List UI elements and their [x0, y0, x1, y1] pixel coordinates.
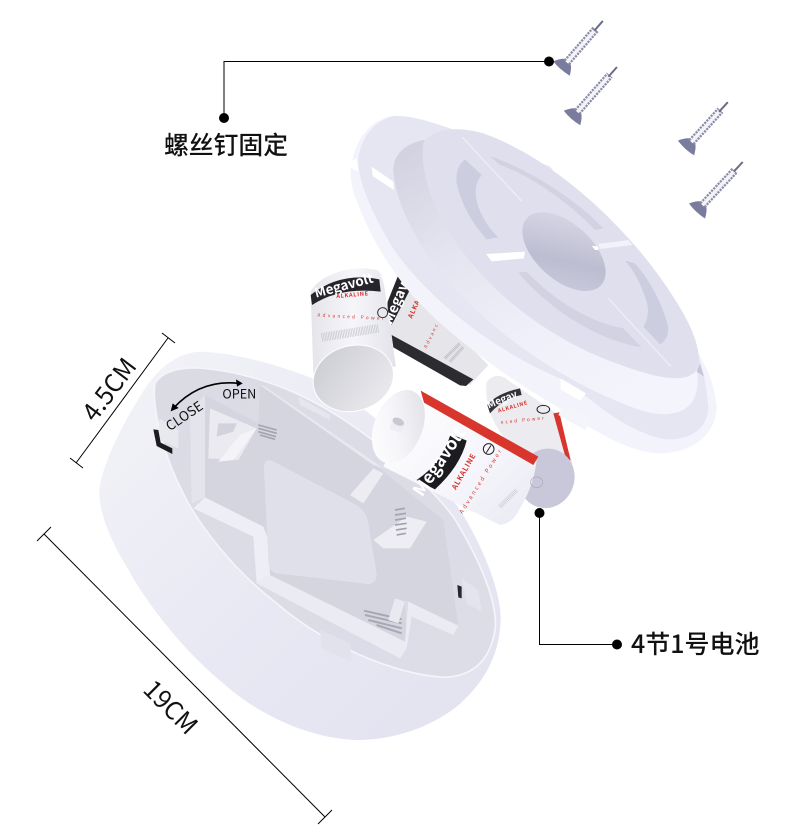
- compartment left wall: [190, 395, 205, 503]
- fine print: [445, 343, 463, 362]
- battery D terminal: [389, 416, 405, 433]
- spring lower: [364, 611, 402, 633]
- brand text: Megav: [378, 279, 413, 327]
- black band top: [387, 275, 411, 325]
- battery A power: Advanced Power: [317, 312, 386, 322]
- dimension line: diameter: [37, 527, 332, 824]
- compartment wall band bottom: [257, 575, 458, 658]
- battery A body: [311, 268, 396, 373]
- screw 3: [677, 95, 736, 156]
- spring right: [395, 508, 407, 535]
- bottom clip: [320, 630, 352, 662]
- side switch: [457, 578, 482, 612]
- battery D red strip: [421, 391, 538, 465]
- battery D top end: [362, 382, 435, 471]
- battery body: [486, 376, 573, 483]
- battery A label: [311, 277, 381, 305]
- housing cavity: [154, 368, 495, 677]
- dimension line: height: [70, 333, 175, 468]
- screw 2: [563, 60, 625, 126]
- flange silhouette: [351, 116, 717, 453]
- alkaline text: ALKA: [404, 298, 422, 321]
- black band bottom: [392, 335, 473, 386]
- metal contact right: [350, 468, 427, 548]
- battery body: [389, 275, 488, 385]
- battery D alkaline: ALKALINE: [448, 451, 479, 493]
- battery D mark: [483, 444, 494, 454]
- label: four D batteries: 4节1号电池: [631, 625, 760, 661]
- battery A fine print: [322, 328, 378, 337]
- spring contact tab: [388, 598, 405, 623]
- cutout lower: [561, 378, 586, 401]
- brand text: Megav: [484, 386, 519, 411]
- battery A: [306, 268, 401, 420]
- battery D power: Advanced Power: [456, 446, 505, 515]
- small slot: [592, 246, 598, 250]
- dimension label: 4.5CM: 4.5CM: [73, 350, 144, 428]
- crescent groove right: [625, 261, 668, 344]
- arc groove bottom: [518, 272, 642, 347]
- crescent groove left: [456, 159, 498, 239]
- battery A mark: [378, 308, 388, 318]
- dimension label: 19CM: 19CM: [136, 671, 207, 742]
- screw 1: [553, 14, 611, 76]
- arc groove top: [490, 156, 603, 230]
- slot right: [598, 240, 633, 249]
- latch: [153, 418, 178, 454]
- center recess: [508, 197, 620, 306]
- center panel: [264, 460, 377, 584]
- compartment wall band left: [193, 497, 270, 583]
- battery D: [362, 382, 543, 525]
- battery D label: [417, 434, 467, 489]
- rotation arrow: [171, 379, 243, 411]
- alkaline text: ALKALINE: [496, 398, 529, 415]
- advanced text: Advanc: [422, 321, 441, 349]
- battery compartment floor: [205, 385, 458, 645]
- black band: [487, 388, 522, 413]
- top mounting plate: [350, 116, 717, 453]
- flange tab: [558, 405, 592, 430]
- housing outer wall: [99, 352, 501, 740]
- battery back black band: [378, 275, 488, 386]
- upper clip: [298, 397, 330, 420]
- slot left: [486, 252, 525, 261]
- power text: nced Power: [500, 414, 546, 426]
- edge notch: [350, 158, 358, 172]
- cutout left: [372, 167, 394, 190]
- flange top surface: [358, 116, 708, 439]
- disc side wall: [393, 140, 698, 414]
- battery A brand: Megavolt: [312, 268, 375, 302]
- battery D brand: Megavolt: [406, 421, 470, 500]
- battery A end: [306, 336, 401, 420]
- spring upper: [258, 425, 277, 439]
- metal contact upper: [208, 408, 257, 462]
- label: screw fixing: 螺丝钉固定: [164, 126, 288, 162]
- leader line: screws: [219, 56, 554, 123]
- disc face: [423, 129, 699, 378]
- leader line: batteries: [534, 508, 622, 650]
- battery D body: [383, 390, 537, 525]
- polarity mark: [537, 405, 550, 413]
- red strip: [553, 412, 571, 461]
- rib lower: [608, 298, 671, 367]
- rib upper: [462, 137, 522, 201]
- screw 4: [688, 154, 751, 219]
- batteries front: [306, 268, 543, 525]
- label open: OPEN: [222, 384, 256, 403]
- battery D inner end: [531, 477, 543, 488]
- bottom housing: [99, 352, 501, 740]
- label close: CLOSE: [162, 396, 206, 435]
- battery D fine print: [500, 490, 517, 507]
- compartment upper wall: [260, 385, 383, 468]
- flange shade: [697, 363, 704, 377]
- battery A alkaline: ALKALINE: [335, 288, 369, 300]
- battery end: [510, 441, 583, 516]
- battery back red band: [484, 376, 583, 516]
